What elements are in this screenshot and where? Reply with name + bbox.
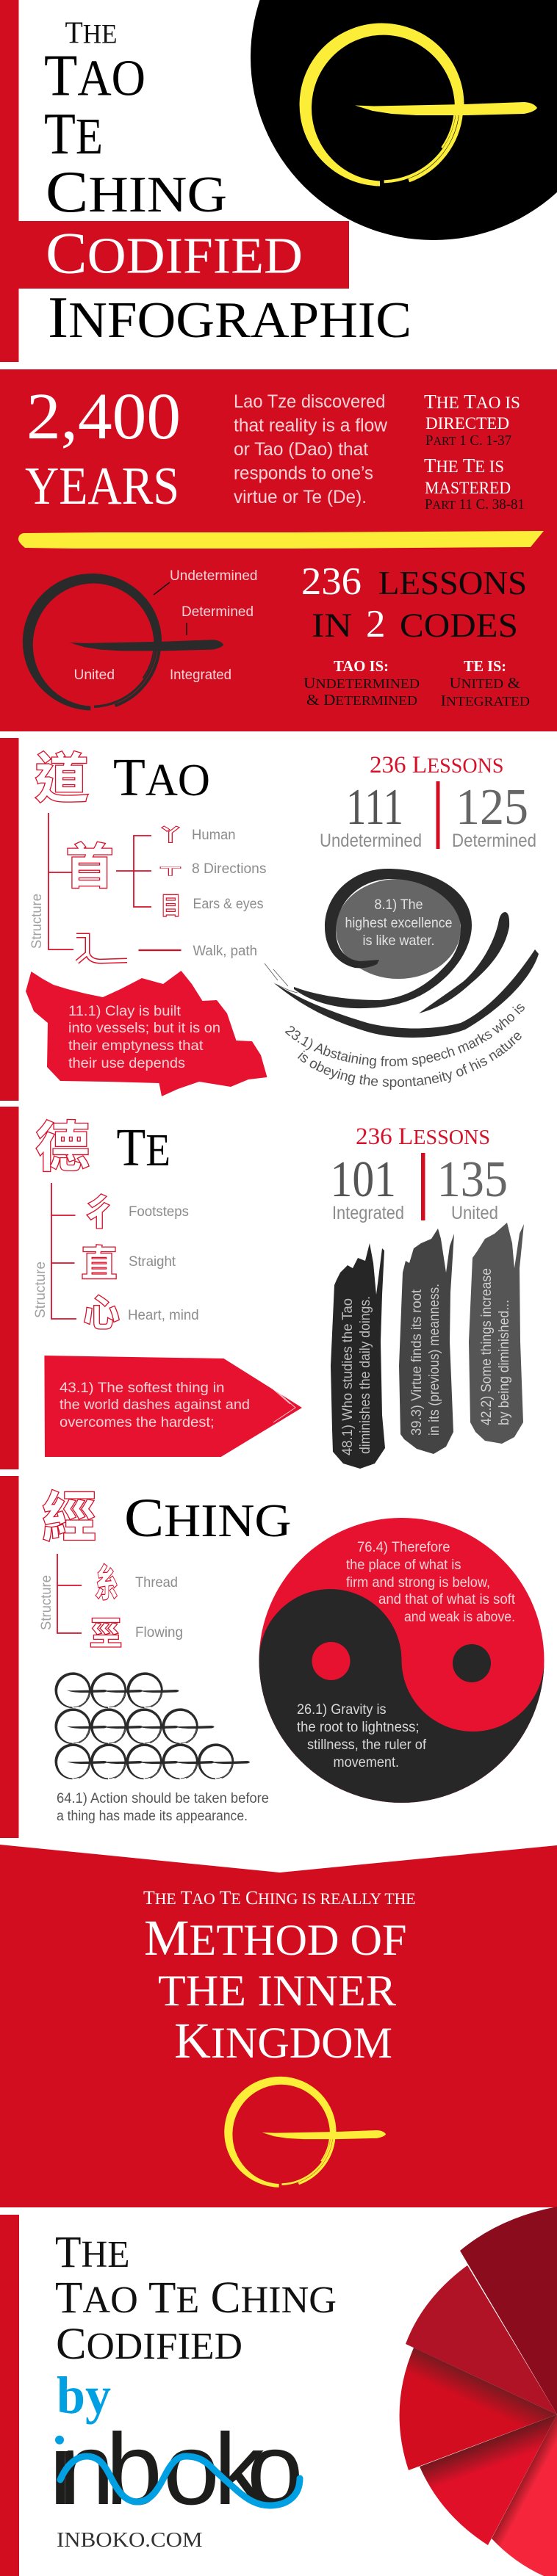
brush sweep: middle: [419, 912, 509, 1013]
brush bar: quote 42.2: by being diminished...: [497, 1300, 512, 1425]
text block: Te is: [441, 657, 530, 709]
logo: inboko: inboko: [49, 2413, 303, 2526]
quote 11.1: [68, 1003, 220, 1071]
stat: 135 united: 135: [437, 1151, 508, 1208]
quote 76.4: the place of what is: [346, 1557, 461, 1573]
icon: yellow enso: [300, 23, 537, 187]
structure tree: [39, 1554, 183, 1652]
panel: Te: [0, 1107, 524, 1469]
panel: credits: [0, 2207, 557, 2576]
heading: kingdom: KINGDOM: [174, 2013, 392, 2069]
heading: 236 lessons in 2 codes: LESSONS: [378, 564, 527, 601]
brush bar: quote 39.3: 39.3) Virtue finds its root: [409, 1289, 425, 1436]
panel: method of the inner kingdom: [0, 1845, 557, 2207]
quote 64.1: 64.1) Action should be taken before: [57, 1790, 269, 1806]
quote 76.4: and that of what is soft: [378, 1591, 516, 1607]
stat: 125 determined: 125: [456, 779, 528, 836]
left red bar: [0, 0, 19, 362]
title: Infographic: INFOGRAPHIC: [48, 284, 412, 350]
title: Tao: TAO: [44, 42, 145, 108]
quote 11.1: their use depends: [68, 1055, 185, 1071]
quote 11.1: into vessels; but it is on: [68, 1020, 220, 1036]
title: Te: TE: [44, 101, 103, 167]
quote 26.1: stillness, the ruler of: [307, 1737, 427, 1753]
quote 76.4: firm and strong is below,: [346, 1574, 490, 1591]
label: walk, path: Walk, path: [193, 943, 257, 959]
character: straight: 直: [81, 1243, 118, 1284]
heading: 236 lessons in 2 codes: IN: [312, 607, 352, 645]
stat: 101 integrated: Integrated: [332, 1203, 404, 1223]
quote 8.1: 8.1) The: [375, 897, 423, 913]
yin yang chart: [259, 1518, 544, 1803]
text block: parts of the book: MASTERED: [425, 479, 511, 497]
quote 11.1: their emptyness that: [68, 1038, 204, 1054]
left red bar: [0, 1107, 19, 1469]
character: flowing: 巠: [89, 1615, 123, 1652]
character: thread: 糸: [95, 1563, 118, 1605]
big word: years: YEARS: [25, 456, 179, 515]
red clay blob callout: [26, 971, 267, 1096]
text block: Tao is: UNDETERMINED: [303, 674, 420, 692]
quote 43.1: [60, 1380, 250, 1430]
text block: Te is: INTEGRATED: [441, 692, 530, 709]
stat: 135 united: United: [451, 1203, 498, 1223]
icon: eight directions: 丅: [159, 866, 182, 877]
text block: parts of the book: THE TE IS: [424, 455, 504, 477]
title: The: THE: [65, 16, 118, 50]
label: structure: Structure: [39, 1575, 54, 1630]
left red bar: [0, 1476, 19, 1838]
quote 11.1: 11.1) Clay is built: [68, 1003, 182, 1019]
panel: Tao: [0, 738, 539, 1101]
quote 26.1: [297, 1701, 427, 1770]
structure tree: [33, 1183, 199, 1334]
stat: 111 undetermined: 111: [346, 779, 403, 836]
brush streak lines: [265, 963, 298, 993]
quote 76.4: [346, 1539, 516, 1625]
fan graphic: [400, 2207, 557, 2576]
icon: yellow enso: [224, 2077, 386, 2188]
panel: Ching: [0, 1476, 544, 1838]
label: structure: Structure: [33, 1262, 48, 1318]
text: Codified: CODIFIED: [56, 2320, 242, 2369]
heading: the inner: THE INNER: [158, 1967, 396, 2015]
left red bar: [0, 2215, 19, 2576]
quote 64.1: a thing has made its appearance.: [57, 1808, 248, 1824]
text: The: THE: [55, 2228, 129, 2277]
quote 8.1: [345, 897, 453, 949]
heading: 236 lessons: 236 LESSONS: [370, 752, 504, 778]
text block: Te is: UNITED &: [450, 674, 520, 692]
curved quote 23.1: is obeying the spontaneity of his nature.: [297, 1032, 522, 1090]
text block: parts of the book: DIRECTED: [425, 414, 509, 433]
big number: 2,400: 2,400: [26, 380, 181, 453]
arrow highlight strokes: [257, 1375, 295, 1422]
divider: [421, 1153, 425, 1220]
pointer: undetermined: [154, 582, 170, 595]
heading: 236 lessons in 2 codes: 236: [301, 560, 362, 603]
heading: Tao: TAO: [113, 748, 210, 807]
icon group: enso grid: [54, 1672, 250, 1779]
label: straight: Straight: [129, 1253, 176, 1270]
label: footsteps: Footsteps: [129, 1204, 189, 1220]
label: flowing: Flowing: [135, 1624, 183, 1640]
heading: method of: METHOD OF: [144, 1910, 407, 1966]
character: shou: 首: [65, 839, 114, 894]
brush bar: quote 39.3: [399, 1229, 454, 1454]
yellow brush divider: [18, 531, 544, 549]
quote 64.1: [57, 1790, 269, 1824]
text block: parts of the book: THE TAO IS: [424, 391, 520, 413]
icon: human: 丫: [159, 825, 182, 844]
brush bar: quote 48.1: diminishes the daily doings.: [358, 1296, 373, 1454]
quote 43.1: the world dashes against and: [60, 1397, 250, 1413]
text block: Tao is: TAO IS:: [334, 657, 389, 675]
heading: 236 lessons in 2 codes: 2: [366, 603, 385, 645]
text: Tao Te Ching: TAO TE CHING: [55, 2273, 337, 2323]
quote 43.1: overcomes the hardest;: [60, 1414, 215, 1430]
stat: 101 integrated: 101: [331, 1151, 396, 1208]
panel: 2,400 years and 236 lessons: [0, 369, 557, 731]
character: de: 德: [35, 1117, 90, 1178]
brush bar: quote 42.2: 42.2) Some things increase: [479, 1268, 495, 1425]
quote 8.1: is like water.: [363, 933, 435, 949]
text block: parts of the book: [424, 391, 525, 513]
text block: Lao Tze: responds to one’s: [234, 463, 373, 484]
character: dao: 道: [35, 748, 89, 809]
text block: parts of the book: PART 11 C. 38-81: [425, 496, 525, 513]
stat: 125 determined: Determined: [452, 831, 536, 851]
black circle: [251, 0, 557, 240]
label: structure: Structure: [29, 894, 45, 949]
curved quote 23.1: 23.1) Abstaining from speech marks who is: [285, 1004, 525, 1068]
red arrow callout: [44, 1356, 302, 1457]
text block: Lao Tze: that reality is a flow: [234, 416, 388, 436]
quote 8.1: highest excellence: [345, 915, 453, 931]
divider: [436, 781, 439, 849]
label: ears and eyes: Ears & eyes: [193, 896, 264, 912]
text block: Lao Tze: [234, 391, 388, 507]
left red bar: [0, 738, 19, 1101]
text: by: by: [57, 2366, 111, 2425]
title: Codified: CODIFIED: [46, 220, 303, 286]
character: jing: 經: [42, 1487, 96, 1548]
stat: 111 undetermined: Undetermined: [320, 831, 422, 851]
heading: 236 lessons: 236 LESSONS: [356, 1124, 490, 1150]
heading: 236 lessons in 2 codes: CODES: [400, 607, 518, 645]
label: 8 directions: 8 Directions: [192, 861, 267, 877]
text block: Tao is: [303, 657, 420, 709]
brush bar: quote 48.1: 48.1) Who studies the Tao: [340, 1298, 356, 1455]
brush bar: quote 42.2: [469, 1223, 524, 1444]
text: url: INBOKO.COM: [57, 2529, 203, 2552]
label: thread: Thread: [135, 1574, 178, 1591]
label: undetermined: Undetermined: [170, 568, 257, 584]
brush bar: quote 48.1: [331, 1243, 385, 1469]
text block: Tao is: & DETERMINED: [306, 691, 417, 709]
spiral brush with quote 8.1: [265, 869, 472, 1008]
red background: [0, 369, 557, 731]
heading: 236 lessons in 2 codes: [301, 560, 527, 645]
text block: Lao Tze: or Tao (Dao) that: [234, 439, 368, 460]
red title band: [0, 221, 349, 289]
structure tree: [29, 813, 267, 962]
label: integrated: Integrated: [170, 667, 231, 683]
quote 26.1: 26.1) Gravity is: [297, 1701, 387, 1718]
character: heart: 心: [83, 1293, 120, 1334]
red chevron background: [0, 1845, 557, 2207]
character: footsteps: 彳: [81, 1192, 118, 1233]
connector: walk: [138, 949, 181, 951]
icon: ears and eyes: 目: [160, 893, 182, 920]
brush bar: quote 39.3: in its (previous) meanness.: [427, 1284, 442, 1436]
text block: parts of the book: PART 1 C. 1-37: [425, 433, 511, 449]
title: Ching: CHING: [46, 159, 227, 225]
label: heart, mind: Heart, mind: [128, 1307, 199, 1323]
icon: dark enso with labels: [23, 568, 257, 710]
label: human: Human: [192, 827, 235, 843]
quote 76.4: 76.4) Therefore: [357, 1539, 450, 1555]
text block: Lao Tze: Lao Tze discovered: [234, 391, 385, 412]
quote 43.1: 43.1) The softest thing in: [60, 1380, 225, 1396]
label: determined: Determined: [182, 604, 254, 620]
quote 26.1: movement.: [334, 1754, 399, 1770]
heading: Ching: CHING: [124, 1488, 291, 1549]
heading: Te: TE: [116, 1118, 170, 1177]
quote 76.4: and weak is above.: [404, 1609, 515, 1625]
icon: walk radical: [76, 936, 127, 962]
pointer: determined: [186, 623, 187, 635]
subheading: THE TAO TE CHING IS REALLY THE: [143, 1887, 416, 1909]
quote 26.1: the root to lightness;: [297, 1719, 419, 1735]
panel: header: [0, 0, 557, 362]
text block: Lao Tze: virtue or Te (De).: [234, 487, 367, 507]
text block: Te is: TE IS:: [464, 657, 506, 675]
stat: 111 undetermined: [320, 779, 422, 851]
label: united: United: [73, 667, 115, 683]
brush sweep: outer: [273, 949, 539, 1038]
